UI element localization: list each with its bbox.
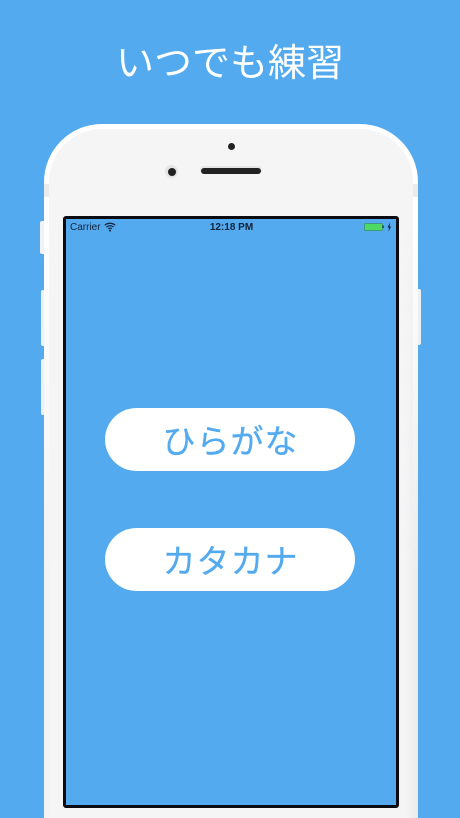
phone mockup	[40, 124, 421, 818]
button: hiragana: ひらがな	[162, 423, 298, 460]
side button: volume down	[41, 359, 45, 415]
side button: power	[415, 289, 421, 345]
status bar carrier: Carrier	[70, 222, 101, 233]
sensor lens	[168, 168, 176, 176]
home sensor	[165, 165, 178, 178]
phone body	[44, 124, 418, 818]
antenna band: left	[44, 184, 49, 197]
screen	[63, 216, 399, 808]
title: いつでも練習	[116, 43, 344, 85]
button: hiragana	[105, 408, 355, 471]
speaker	[201, 168, 261, 174]
antenna band: right	[413, 184, 418, 197]
button: katakana	[105, 528, 355, 591]
status bar time: 12:18 PM	[210, 222, 253, 233]
front camera	[228, 143, 235, 150]
side button: volume up	[41, 290, 45, 346]
icon: wifi	[104, 222, 116, 232]
icon: battery charging bolt	[382, 222, 391, 232]
button: katakana: カタカナ	[162, 543, 298, 580]
lower left edge shading	[44, 474, 49, 818]
side button: mute	[40, 221, 45, 254]
lower right edge shading	[413, 366, 418, 818]
icon: battery	[364, 223, 383, 231]
